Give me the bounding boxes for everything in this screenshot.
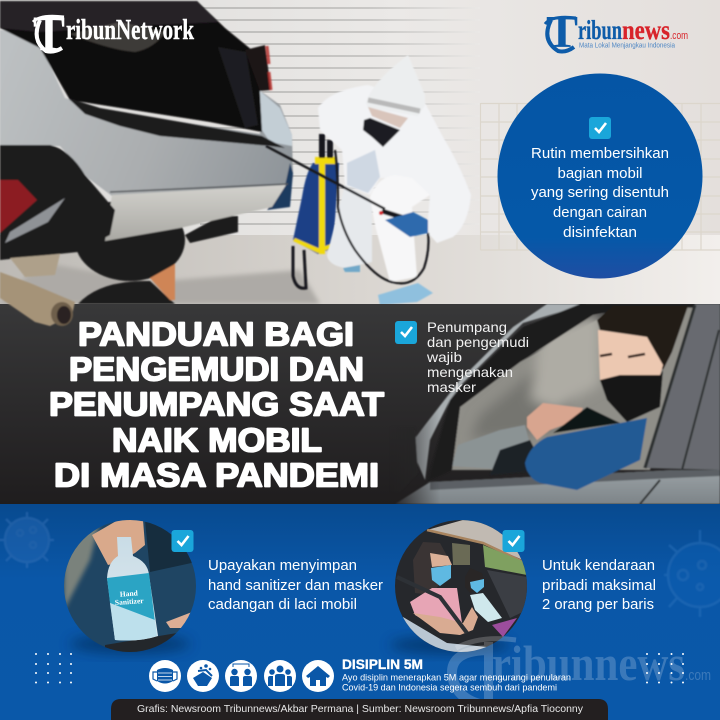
sprayer backpack [293, 134, 339, 288]
decorative dots left [35, 653, 72, 684]
panel: disinfect callout [498, 74, 702, 278]
icon: check [395, 321, 417, 344]
blue lower panel [0, 504, 720, 720]
callout text [531, 146, 669, 241]
note text: wajib [426, 349, 462, 365]
car body [0, 30, 293, 196]
sanitizer bottle [107, 537, 158, 640]
shoe cover [378, 283, 433, 305]
callout text: dengan cairan [553, 205, 647, 221]
torso and arm [318, 85, 471, 243]
callout text: yang sering disentuh [531, 185, 669, 201]
car [0, 1, 293, 304]
icon: check [172, 530, 194, 552]
icon: check [502, 530, 524, 552]
logo: Tribun Network [33, 5, 194, 61]
5M message [342, 657, 571, 694]
note text: dan pengemudi [427, 334, 529, 350]
corrugated wall [0, 0, 720, 240]
sanitizer text: Upayakan menyimpan [208, 558, 357, 574]
icon: face mask [149, 660, 181, 692]
hose [335, 150, 428, 283]
back leg [327, 185, 372, 268]
watermark: Tribunnews: ribunnews [492, 635, 685, 691]
logo: Tribunnews.com: Mata Lokal Menjangkau Indonesia [579, 42, 675, 50]
door panel [395, 470, 720, 504]
5M icons row [149, 660, 334, 692]
car window interior [452, 304, 700, 470]
icon: distancing [225, 660, 257, 692]
callout text: bagian mobil [558, 166, 642, 182]
sanitizer bottle: Hand [120, 588, 139, 599]
sanitizer text: hand sanitizer dan masker [208, 578, 383, 594]
icon: virus right [664, 530, 720, 617]
A pillar [410, 304, 587, 480]
open trunk [0, 1, 262, 132]
note text: mengenakan [427, 364, 513, 380]
passengers text: 2 orang per baris [542, 597, 654, 613]
logo: Tribunnews.com: .com [670, 30, 688, 42]
5M message: Covid-19 dan Indonesia segera sembuh dari pandemi [342, 682, 557, 694]
hand [527, 403, 583, 440]
title: PANDUAN BAGI [78, 316, 354, 354]
title: PENUMPANG SAAT [49, 386, 385, 424]
face [598, 330, 663, 380]
respirator mask [363, 118, 400, 147]
callout text: disinfektan [563, 225, 637, 241]
title: DI MASA PANDEMI [54, 458, 379, 494]
circle photo: passengers [390, 518, 530, 655]
note text: Penumpang [427, 319, 507, 335]
sanitizer text [208, 558, 383, 613]
note text [426, 319, 529, 395]
goggles and face [368, 107, 408, 128]
tail light [0, 180, 37, 233]
hood [376, 55, 424, 102]
callout text: Rutin membersihkan [531, 146, 669, 162]
car tire [75, 199, 185, 281]
icon: virus left [0, 512, 54, 568]
logo: Tribunnews.com: ribun [578, 15, 622, 45]
exhaust pipe [0, 272, 75, 326]
passengers text: pribadi maksimal [542, 578, 656, 594]
logo: Tribunnews.com: news [622, 15, 670, 45]
floor [0, 235, 720, 304]
icon: check [589, 117, 611, 139]
credits bar [111, 699, 608, 720]
car window sill [403, 617, 487, 655]
5M message: DISIPLIN 5M [342, 657, 423, 672]
icon: crowd [264, 660, 296, 692]
sanitizer text: cadangan di laci mobil [208, 597, 357, 613]
logo: Tribunnews.com: T [546, 6, 578, 57]
hand [92, 520, 145, 565]
logo: Tribun Network: ribunNetwork [66, 15, 194, 46]
title [49, 316, 385, 494]
5M message: Ayo disiplin menerapkan 5M agar mengurangi penularan [342, 672, 571, 684]
child [465, 568, 484, 593]
hair [597, 306, 688, 370]
logo: Tribun Network: T [33, 5, 65, 61]
door pillar [643, 304, 720, 470]
circle photo: hand sanitizer [64, 520, 196, 655]
blue sleeve arm [525, 418, 647, 490]
icon: house [302, 660, 334, 692]
front leg [370, 175, 430, 282]
worker in protective suit [266, 55, 471, 305]
spray wand [266, 146, 385, 209]
title: NAIK MOBIL [112, 422, 322, 460]
dashboard [452, 425, 530, 470]
watermark: Tribunnews: .com [685, 667, 711, 684]
top photo panel: car disinfection [0, 0, 720, 305]
grid backdrop [480, 103, 720, 250]
black bumper corner [0, 145, 115, 260]
dark title band [0, 304, 720, 504]
credits bar: Grafis: Newsroom Tribunnews/Akbar Permana | Sumber: Newsroom Tribunnews/Apfia Tioconny [137, 703, 584, 715]
decorative dots right [646, 653, 684, 684]
photo: driver wearing mask [390, 304, 720, 504]
woman [413, 542, 452, 595]
trunk lip [68, 98, 285, 148]
logo: Tribunnews.com [545, 6, 688, 57]
mirror [410, 438, 418, 465]
note text: masker [427, 379, 476, 395]
glove [385, 212, 428, 237]
passengers text [542, 558, 656, 613]
black mask [600, 370, 663, 422]
title: PENGEMUDI DAN [69, 352, 364, 388]
watermark: Tribunnews [452, 635, 711, 706]
bumper [105, 185, 286, 241]
mask requirement note [395, 319, 529, 395]
passengers text: Untuk kendaraan [542, 558, 655, 574]
sanitizer bottle: Sanitizer [115, 596, 145, 607]
icon: hand washing [187, 660, 219, 692]
